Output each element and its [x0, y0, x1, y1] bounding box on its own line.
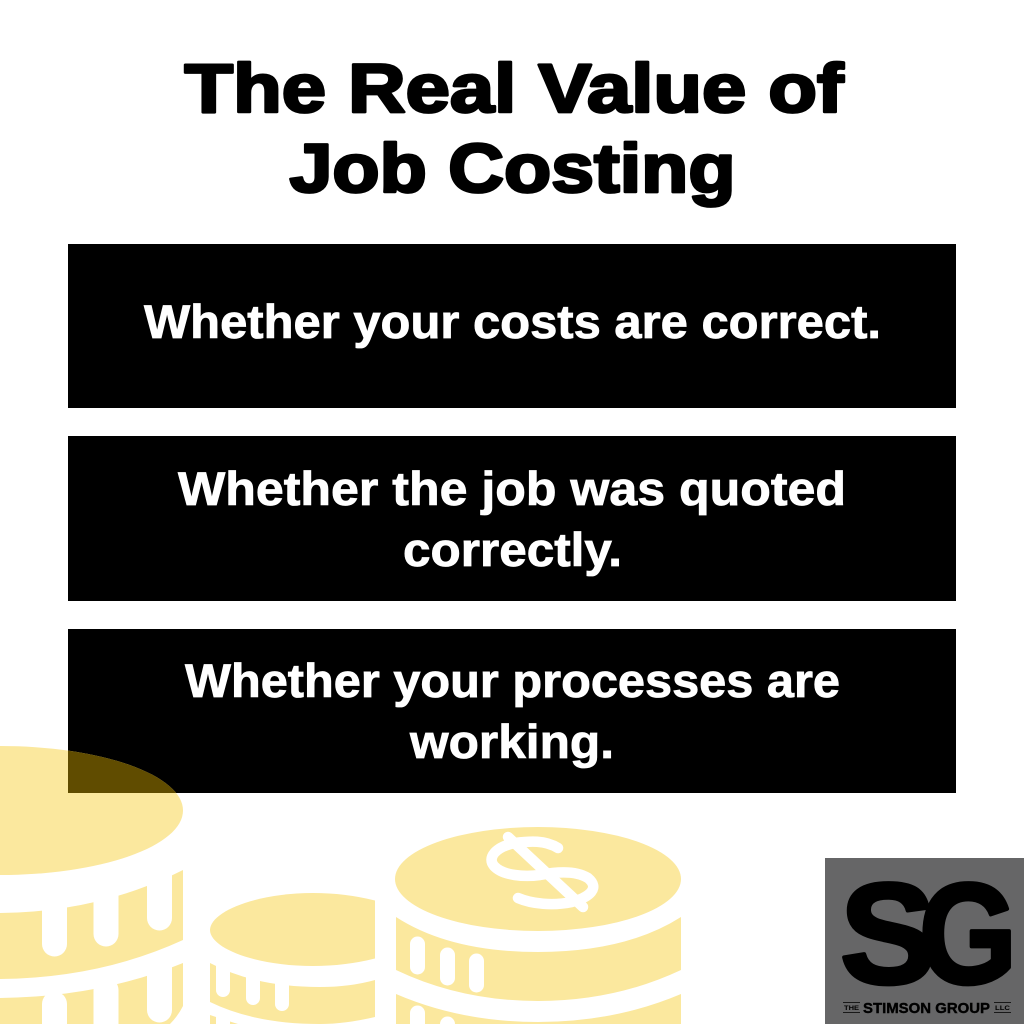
icon: large coin stack [0, 746, 183, 1024]
title: Job Costing [290, 130, 736, 207]
panel: job quoted correctly: correctly. [403, 523, 622, 576]
logo: The Stimson Group [825, 855, 1024, 1024]
panel: processes working: working. [409, 715, 614, 768]
panel: processes working [68, 629, 956, 793]
logo: The Stimson Group: THE [844, 1005, 860, 1012]
icon: dollar coin stack [395, 827, 681, 1024]
logo: The Stimson Group: LLC [995, 1005, 1010, 1012]
title: The Real Value of [184, 50, 845, 127]
logo: The Stimson Group: S [840, 855, 936, 1014]
title [184, 50, 845, 207]
icon: small coin stack [210, 893, 375, 1024]
logo: The Stimson Group: STIMSON GROUP [863, 1000, 990, 1017]
icon: dollar sign [492, 837, 593, 907]
panel: processes working: Whether your processes are [185, 654, 840, 707]
panel: job quoted correctly [68, 436, 956, 601]
panel: job quoted correctly: Whether the job was quoted [178, 462, 846, 515]
panel: costs correct [68, 244, 956, 408]
panel: costs correct: Whether your costs are correct. [144, 295, 881, 348]
